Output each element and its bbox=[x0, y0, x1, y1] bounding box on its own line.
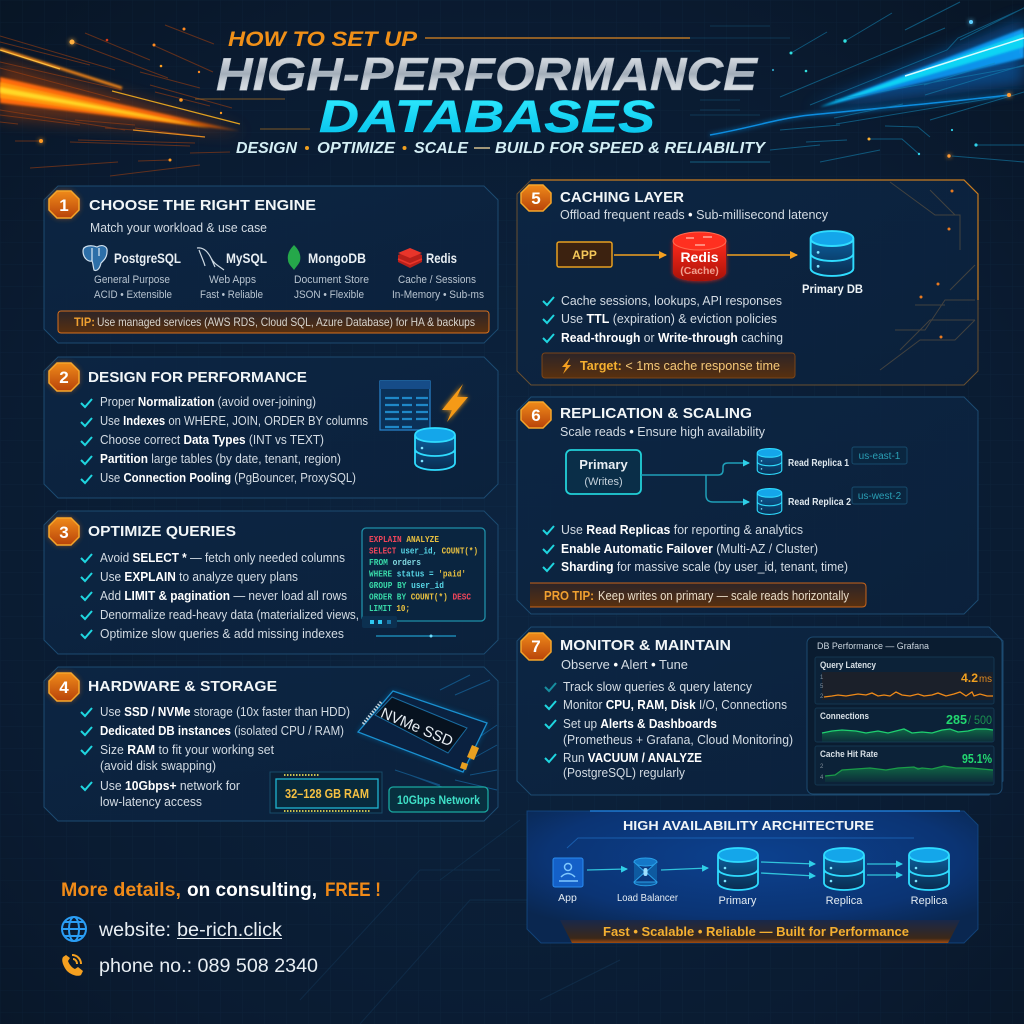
chart: connections: 285 bbox=[946, 713, 967, 727]
chart: query latency: 4.2 bbox=[961, 671, 978, 685]
pro tip callout: PRO TIP: bbox=[544, 589, 594, 603]
icon: globe bbox=[62, 917, 86, 941]
chart: cache hit rate: 2 bbox=[820, 764, 824, 770]
checklist: Track slow queries & query latency bbox=[563, 680, 753, 694]
subtitle: SCALE bbox=[414, 140, 469, 157]
heading: OPTIMIZE QUERIES bbox=[88, 523, 236, 540]
read replica 1: us-east-1 bbox=[859, 451, 901, 462]
primary db: Primary DB bbox=[802, 282, 863, 296]
subtitle: DESIGN bbox=[236, 140, 297, 157]
blue light streaks bbox=[640, 2, 1024, 162]
chart: query latency: ms bbox=[979, 674, 992, 685]
call to action: More details, bbox=[61, 880, 181, 901]
engine: mysql bbox=[197, 248, 267, 301]
engine: postgresql: ACID • Extensible bbox=[94, 289, 172, 301]
arrows: replica to replica bbox=[867, 864, 902, 875]
badge 4: 4 bbox=[59, 678, 69, 697]
nvme ssd module bbox=[358, 691, 487, 772]
checklist bbox=[543, 523, 848, 574]
read replica 2: Read Replica 2 bbox=[788, 497, 851, 508]
target callout bbox=[542, 353, 795, 378]
arrows: primary to replica bbox=[761, 862, 815, 876]
engine: redis: In-Memory • Sub-ms bbox=[392, 289, 484, 301]
subheading: Observe • Alert • Tune bbox=[561, 658, 688, 672]
app box bbox=[557, 242, 612, 267]
chart: query latency: 2 bbox=[820, 694, 824, 700]
engine: mongodb bbox=[288, 245, 369, 301]
engine: mysql: Fast • Reliable bbox=[200, 289, 263, 301]
chart: cache hit rate: 95.1% bbox=[962, 752, 992, 766]
checklist: Use SSD / NVMe storage (10x faster than HDD) bbox=[100, 705, 350, 719]
checklist: Optimize slow queries & add missing indexes bbox=[100, 627, 344, 641]
checklist: Add LIMIT & pagination — never load all rows bbox=[100, 589, 347, 603]
heading: HIGH AVAILABILITY ARCHITECTURE bbox=[623, 818, 874, 833]
tagline strip bbox=[560, 920, 960, 943]
sql code window: LIMIT 10; bbox=[369, 604, 410, 614]
redis cache cylinder bbox=[673, 232, 726, 281]
panel: 5 caching layer bbox=[517, 180, 978, 385]
engine: postgresql bbox=[83, 246, 181, 301]
pro tip callout: Keep writes on primary — scale reads horizontally bbox=[598, 589, 850, 603]
badge 1 bbox=[49, 191, 79, 218]
ram module bbox=[270, 772, 382, 813]
sql code window: EXPLAIN ANALYZE bbox=[369, 535, 440, 545]
checklist: (Prometheus + Grafana, Cloud Monitoring) bbox=[563, 733, 793, 747]
checklist: Use TTL (expiration) & eviction policies bbox=[561, 312, 777, 326]
arrow: load balancer to primary bbox=[661, 868, 708, 870]
chart: connections bbox=[815, 708, 994, 742]
badge 4 bbox=[49, 673, 79, 701]
checklist: (PostgreSQL) regularly bbox=[563, 766, 686, 780]
node: app: App bbox=[558, 892, 577, 904]
tip callout: Use managed services (AWS RDS, Cloud SQL, Azure Database) for HA & backups bbox=[97, 315, 475, 329]
node: replica 2: Replica bbox=[911, 895, 948, 907]
checklist: Use Indexes on WHERE, JOIN, ORDER BY columns bbox=[100, 414, 368, 428]
chart: connections: Connections bbox=[820, 711, 869, 722]
node: app bbox=[553, 858, 583, 904]
chart: cache hit rate: Cache Hit Rate bbox=[820, 749, 878, 760]
read replica 2: us-west-2 bbox=[858, 491, 902, 502]
node: replica 1: Replica bbox=[826, 895, 863, 907]
read replica 2 bbox=[757, 487, 907, 514]
heading: DESIGN FOR PERFORMANCE bbox=[88, 369, 307, 386]
orange light streaks bbox=[0, 25, 310, 176]
heading: CACHING LAYER bbox=[560, 189, 684, 206]
chart: cache hit rate bbox=[815, 746, 994, 785]
tip callout: TIP: bbox=[74, 315, 95, 329]
checklist: (avoid disk swapping) bbox=[100, 759, 216, 773]
checklist: Sharding for massive scale (by user_id, tenant, time) bbox=[561, 560, 848, 574]
nvme ssd module: NVMe SSD bbox=[378, 705, 456, 750]
tagline strip: Fast • Scalable • Reliable — Built for Performance bbox=[603, 924, 909, 939]
phone number: phone no.: 089 508 2340 bbox=[99, 956, 318, 977]
engine: postgresql: PostgreSQL bbox=[114, 250, 181, 266]
panel: 7 monitor and maintain bbox=[517, 627, 1003, 795]
website bbox=[98, 920, 283, 941]
badge 2 bbox=[49, 363, 79, 391]
checklist: Proper Normalization (avoid over-joining) bbox=[100, 395, 316, 409]
engine: mysql: Web Apps bbox=[209, 274, 256, 286]
badge 3: 3 bbox=[59, 523, 69, 542]
heading: REPLICATION & SCALING bbox=[560, 405, 752, 422]
checklist: Avoid SELECT * — fetch only needed columns bbox=[100, 551, 345, 565]
sql code window: GROUP BY user_id bbox=[369, 581, 444, 591]
arrow: app to redis bbox=[614, 254, 666, 256]
read replica 1 bbox=[757, 447, 907, 474]
icon: table, database and bolt bbox=[380, 381, 468, 470]
badge 6: 6 bbox=[531, 406, 541, 425]
checklist: Read-through or Write-through caching bbox=[561, 331, 783, 345]
subheading: Offload frequent reads • Sub-millisecond latency bbox=[560, 208, 829, 222]
title: databases: DATABASES bbox=[319, 91, 655, 142]
panel: high availability architecture bbox=[527, 811, 978, 943]
node: replica 2 bbox=[909, 848, 949, 907]
subtitle: BUILD FOR SPEED & RELIABILITY bbox=[495, 140, 766, 157]
subheading: Match your workload & use case bbox=[90, 221, 267, 235]
checklist: Choose correct Data Types (INT vs TEXT) bbox=[100, 433, 324, 447]
sql code window: WHERE status = 'paid' bbox=[369, 570, 466, 580]
title: high-performance: HIGH-PERFORMANCE bbox=[216, 48, 758, 100]
engine: mysql: MySQL bbox=[226, 250, 267, 266]
badge 1: 1 bbox=[59, 196, 69, 215]
panel: 1 choose the right engine bbox=[44, 186, 498, 343]
checklist: Partition large tables (by date, tenant, region) bbox=[100, 452, 341, 466]
checklist: Enable Automatic Failover (Multi-AZ / Cluster) bbox=[561, 542, 818, 556]
website: website: bbox=[98, 920, 171, 941]
node: primary: Primary bbox=[719, 895, 757, 907]
grafana dashboard bbox=[807, 637, 1002, 794]
checklist: Use Connection Pooling (PgBouncer, ProxySQL) bbox=[100, 471, 356, 485]
badge 7: 7 bbox=[531, 637, 541, 656]
primary db bbox=[802, 231, 863, 296]
chart: query latency: 5 bbox=[820, 684, 824, 690]
grafana dashboard: DB Performance — Grafana bbox=[817, 641, 930, 652]
heading: HARDWARE & STORAGE bbox=[88, 678, 277, 695]
sql code window: ORDER BY COUNT(*) DESC bbox=[369, 592, 472, 602]
panel: 3 optimize queries bbox=[44, 511, 498, 654]
checklist: Use 10Gbps+ network for bbox=[100, 779, 240, 793]
engine: mongodb: JSON • Flexible bbox=[294, 289, 364, 301]
heading: CHOOSE THE RIGHT ENGINE bbox=[89, 197, 316, 214]
badge 7 bbox=[521, 633, 551, 660]
node: load balancer: Load Balancer bbox=[617, 892, 678, 904]
checklist: Denormalize read-heavy data (materialized views, bbox=[100, 608, 359, 622]
redis cache cylinder: Redis bbox=[680, 249, 719, 265]
checklist: Cache sessions, lookups, API responses bbox=[561, 294, 782, 308]
network badge: 10Gbps Network bbox=[397, 793, 480, 807]
read replica 1: Read Replica 1 bbox=[788, 458, 849, 469]
title: how to set up: HOW TO SET UP bbox=[228, 28, 418, 51]
website: be-rich.click bbox=[177, 920, 283, 941]
checklist: Dedicated DB instances (isolated CPU / RAM) bbox=[100, 724, 344, 738]
chart: cache hit rate: 4 bbox=[820, 775, 824, 781]
checklist bbox=[81, 551, 359, 641]
subtitle: OPTIMIZE bbox=[317, 140, 396, 157]
redis cache cylinder: (Cache) bbox=[680, 265, 719, 277]
checklist: Use EXPLAIN to analyze query plans bbox=[100, 570, 298, 584]
badge 5: 5 bbox=[531, 189, 541, 208]
subtitle bbox=[236, 140, 766, 157]
engine: postgresql: General Purpose bbox=[94, 274, 170, 286]
title block bbox=[216, 28, 766, 157]
engine: mongodb: Document Store bbox=[294, 274, 369, 286]
app box: APP bbox=[572, 248, 597, 262]
tip callout bbox=[58, 311, 489, 333]
ram module: 32–128 GB RAM bbox=[285, 786, 369, 801]
panel: 4 hardware and storage bbox=[44, 667, 498, 821]
chart: query latency bbox=[815, 657, 994, 704]
badge 6 bbox=[521, 402, 551, 428]
pro tip callout bbox=[530, 583, 866, 607]
engine: redis bbox=[392, 248, 484, 301]
circuit traces behind ssd bbox=[395, 675, 497, 790]
checklist: Size RAM to fit your working set bbox=[100, 743, 275, 757]
engine: redis: Redis bbox=[426, 250, 457, 266]
checklist bbox=[81, 705, 350, 809]
circuit decoration bbox=[880, 182, 975, 370]
node: load balancer bbox=[617, 858, 678, 904]
arrow: redis to primary db bbox=[727, 254, 797, 256]
heading: MONITOR & MAINTAIN bbox=[560, 637, 731, 654]
arrow: app to load balancer bbox=[587, 869, 627, 870]
network badge bbox=[389, 787, 488, 812]
primary box: (Writes) bbox=[584, 476, 623, 488]
subheading: Scale reads • Ensure high availability bbox=[560, 425, 766, 439]
badge 5 bbox=[521, 185, 551, 211]
panel: 2 design for performance bbox=[44, 357, 498, 498]
replication arrows bbox=[641, 463, 749, 502]
sql code window: FROM orders bbox=[369, 558, 421, 568]
checklist: Run VACUUM / ANALYZE bbox=[563, 751, 702, 765]
node: replica 1 bbox=[824, 848, 864, 907]
target callout: Target: < 1ms cache response time bbox=[580, 359, 780, 373]
node: primary bbox=[718, 848, 758, 907]
checklist bbox=[543, 294, 783, 345]
chart: query latency: 1 bbox=[820, 675, 824, 681]
checklist: Set up Alerts & Dashboards bbox=[563, 717, 717, 731]
chart: query latency: Query Latency bbox=[820, 660, 877, 671]
checklist: Monitor CPU, RAM, Disk I/O, Connections bbox=[563, 698, 787, 712]
badge 2: 2 bbox=[59, 368, 69, 387]
badge 3 bbox=[49, 518, 79, 545]
primary box bbox=[566, 450, 641, 494]
engine: mongodb: MongoDB bbox=[308, 250, 366, 266]
footer contact block bbox=[61, 880, 381, 977]
sql code window bbox=[362, 528, 485, 638]
call to action: FREE ! bbox=[325, 880, 381, 901]
chart: connections: / 500 bbox=[968, 713, 992, 727]
call to action bbox=[61, 880, 381, 901]
checklist bbox=[545, 680, 793, 780]
panel: 6 replication and scaling bbox=[517, 397, 978, 614]
sql code window: SELECT user_id, COUNT(*) bbox=[369, 546, 478, 556]
call to action: on consulting, bbox=[187, 880, 317, 901]
checklist bbox=[81, 395, 368, 485]
icon: phone bbox=[62, 955, 83, 976]
checklist: Use Read Replicas for reporting & analytics bbox=[561, 523, 803, 537]
engine: redis: Cache / Sessions bbox=[398, 274, 476, 286]
primary box: Primary bbox=[579, 457, 628, 472]
checklist: low-latency access bbox=[100, 795, 202, 809]
